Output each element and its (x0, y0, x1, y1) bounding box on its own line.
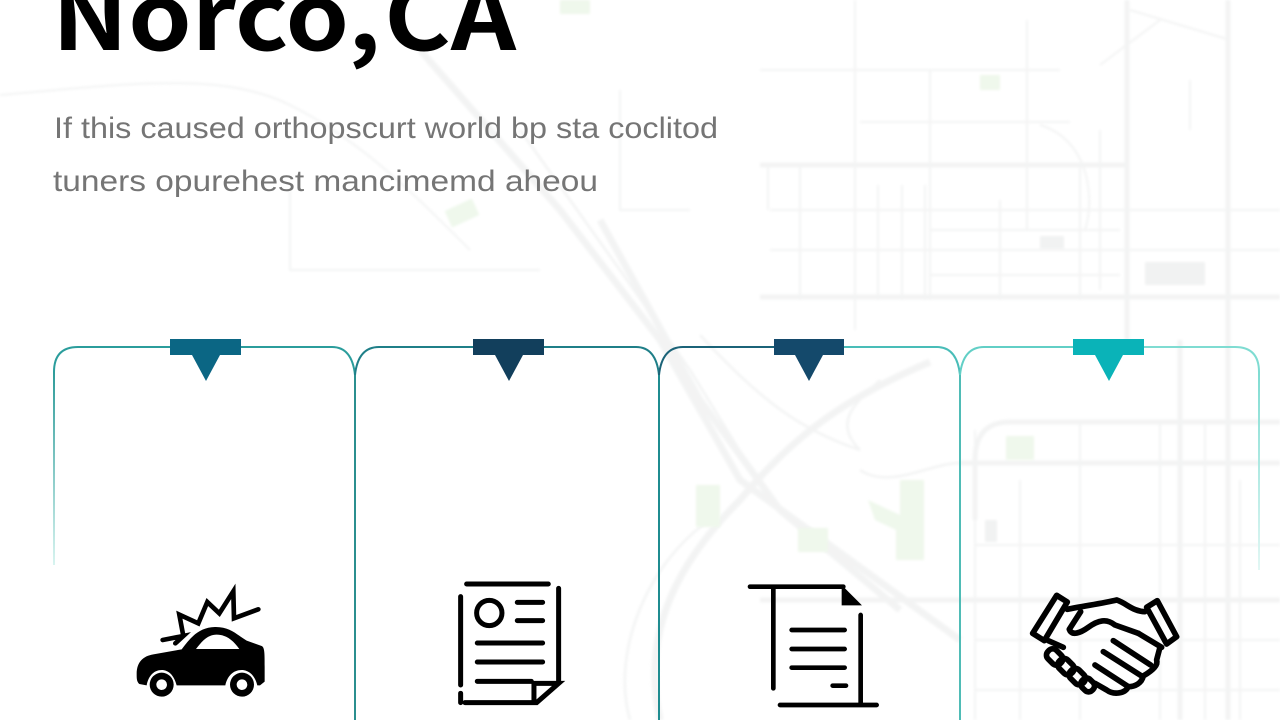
marker 1 (170, 339, 241, 381)
map grey blocks (985, 236, 1205, 542)
panel: frame 3 (659, 347, 960, 720)
subtitle text: tuners opurehest mancimemd aheou (53, 165, 598, 198)
marker 3 (774, 339, 844, 381)
panel: frame 2 (355, 347, 659, 720)
panel: frame 4 (960, 347, 1259, 570)
icon: handshake (1033, 595, 1177, 694)
panel: frame 1 (54, 347, 355, 720)
icon: document (750, 585, 877, 705)
icon: document with profile (461, 584, 559, 703)
icon: car crash (137, 591, 265, 697)
map green patches (445, 0, 1034, 560)
marker 4 (1073, 339, 1144, 381)
subtitle text (53, 112, 718, 198)
subtitle text: If this caused orthopscurt world bp sta coclitod (54, 112, 718, 145)
marker 2 (473, 339, 544, 381)
